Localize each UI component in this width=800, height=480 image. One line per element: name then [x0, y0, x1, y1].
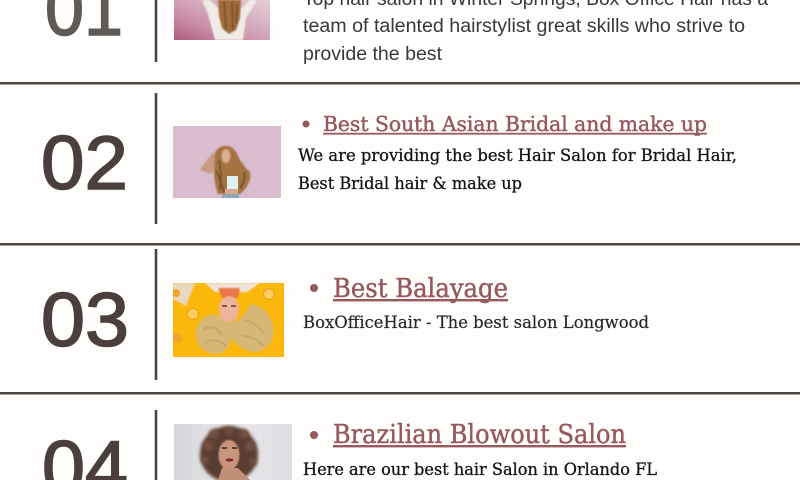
- bullet: [310, 284, 318, 292]
- heading 03: Best Balayage: [333, 274, 508, 304]
- row 03: [41, 249, 649, 380]
- vertical rule 02: [155, 93, 157, 224]
- number 02: 02: [41, 121, 128, 206]
- bullet: [302, 120, 310, 128]
- photo: blonde woman lying on yellow with oranges: [172, 283, 284, 357]
- bullet: [310, 431, 318, 439]
- vertical rule 03: [155, 249, 157, 380]
- text block 02: [298, 146, 737, 193]
- row 04: [42, 410, 657, 480]
- text block 01: team of talented hairstylist great skills who strive to: [303, 16, 745, 37]
- text block 01: provide the best: [303, 44, 443, 65]
- row 01: [45, 0, 768, 65]
- photo: woman with long curly hair on pink: [173, 126, 281, 198]
- vertical rule 04: [155, 410, 157, 480]
- text block 02: We are providing the best Hair Salon for Bridal Hair,: [298, 146, 737, 165]
- vertical rule 01: [155, 0, 157, 62]
- text block 02: Best Bridal hair & make up: [298, 174, 522, 193]
- photo: woman with curly hair on grey: [174, 424, 292, 480]
- photo: woman from behind on pink: [174, 0, 270, 40]
- heading 02: Best South Asian Bridal and make up: [323, 112, 707, 136]
- divider lines: [0, 82, 800, 395]
- text block 03: BoxOfficeHair - The best salon Longwood: [303, 313, 649, 332]
- text block 01: [303, 0, 768, 65]
- row 02: [41, 93, 737, 224]
- text block 04: Here are our best hair Salon in Orlando FL: [303, 460, 657, 479]
- number 03: 03: [41, 278, 129, 363]
- heading 04: Brazilian Blowout Salon: [333, 420, 626, 450]
